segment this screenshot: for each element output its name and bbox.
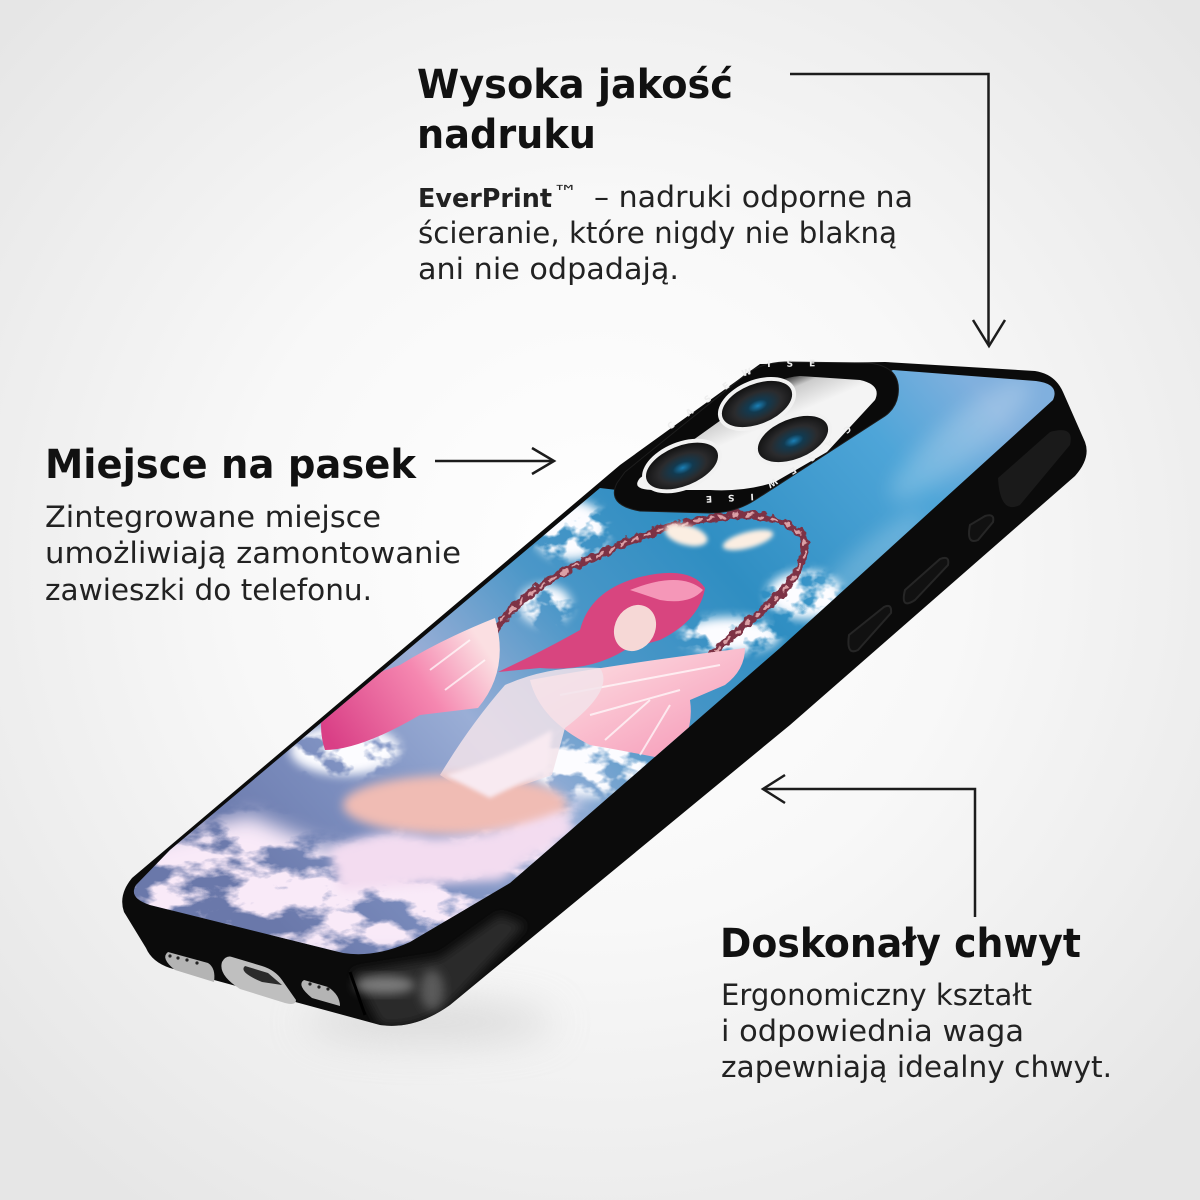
- callout: print quality: [417, 62, 1005, 346]
- body text: EverPrint: [418, 184, 552, 214]
- body text: zapewniają idealny chwyt.: [721, 1050, 1112, 1084]
- case body: [122, 362, 1087, 1026]
- cloud seat: [330, 812, 575, 890]
- body text: umożliwiają zamontowanie: [45, 536, 461, 570]
- upper clouds: [284, 496, 846, 804]
- faint high clouds: [813, 379, 1030, 599]
- bottom ports: [165, 952, 340, 1006]
- camera bump: [614, 360, 899, 514]
- heading: nadruku: [417, 112, 596, 158]
- body text: [721, 978, 1112, 1084]
- wing feathers: [430, 640, 720, 755]
- lower clouds: [134, 790, 588, 952]
- body text: zawieszki do telefonu.: [45, 573, 372, 607]
- lens right: [746, 401, 840, 477]
- camera window: [637, 376, 877, 490]
- brand bottom: CASEWISE: [706, 428, 850, 503]
- callout: grip: [720, 775, 1112, 1084]
- side buttons: [848, 430, 1071, 651]
- callout: strap slot: [45, 442, 554, 607]
- body text: [45, 500, 461, 607]
- body text: i odpowiednia waga: [721, 1014, 1024, 1048]
- body text: – nadruki odporne na: [594, 180, 913, 214]
- phone case: [122, 360, 1087, 1026]
- cream tufts: [662, 520, 775, 554]
- body text: ™: [553, 182, 578, 203]
- body text: Zintegrowane miejsce: [45, 500, 381, 534]
- heading: Miejsce na pasek: [45, 442, 417, 488]
- lens top: [710, 366, 804, 442]
- figure soft form: [343, 775, 567, 835]
- gown hem: [445, 730, 552, 798]
- heading: Doskonały chwyt: [720, 921, 1081, 967]
- right wing: [530, 648, 745, 760]
- heading: Wysoka jakość: [417, 62, 733, 108]
- arrow: [790, 74, 1005, 346]
- body text: [418, 180, 913, 286]
- hair highlight: [630, 580, 703, 601]
- body text: ścieranie, które nigdy nie blakną: [418, 216, 897, 250]
- hair: [498, 573, 705, 672]
- brand top: CASEWISE: [668, 360, 815, 429]
- printed artwork: [134, 370, 1055, 954]
- case glossy corner: [350, 915, 525, 1026]
- arrow: [763, 775, 975, 917]
- heading: [417, 62, 733, 158]
- figure gown: [440, 668, 604, 786]
- body text: ani nie odpadają.: [418, 252, 679, 286]
- ring: [494, 514, 806, 665]
- body text: Ergonomiczny kształt: [721, 978, 1032, 1012]
- lens left: [634, 428, 730, 504]
- phone shadow: [305, 1002, 555, 1042]
- left wing: [321, 618, 500, 750]
- figure head: [614, 604, 656, 652]
- arrow: [435, 448, 554, 474]
